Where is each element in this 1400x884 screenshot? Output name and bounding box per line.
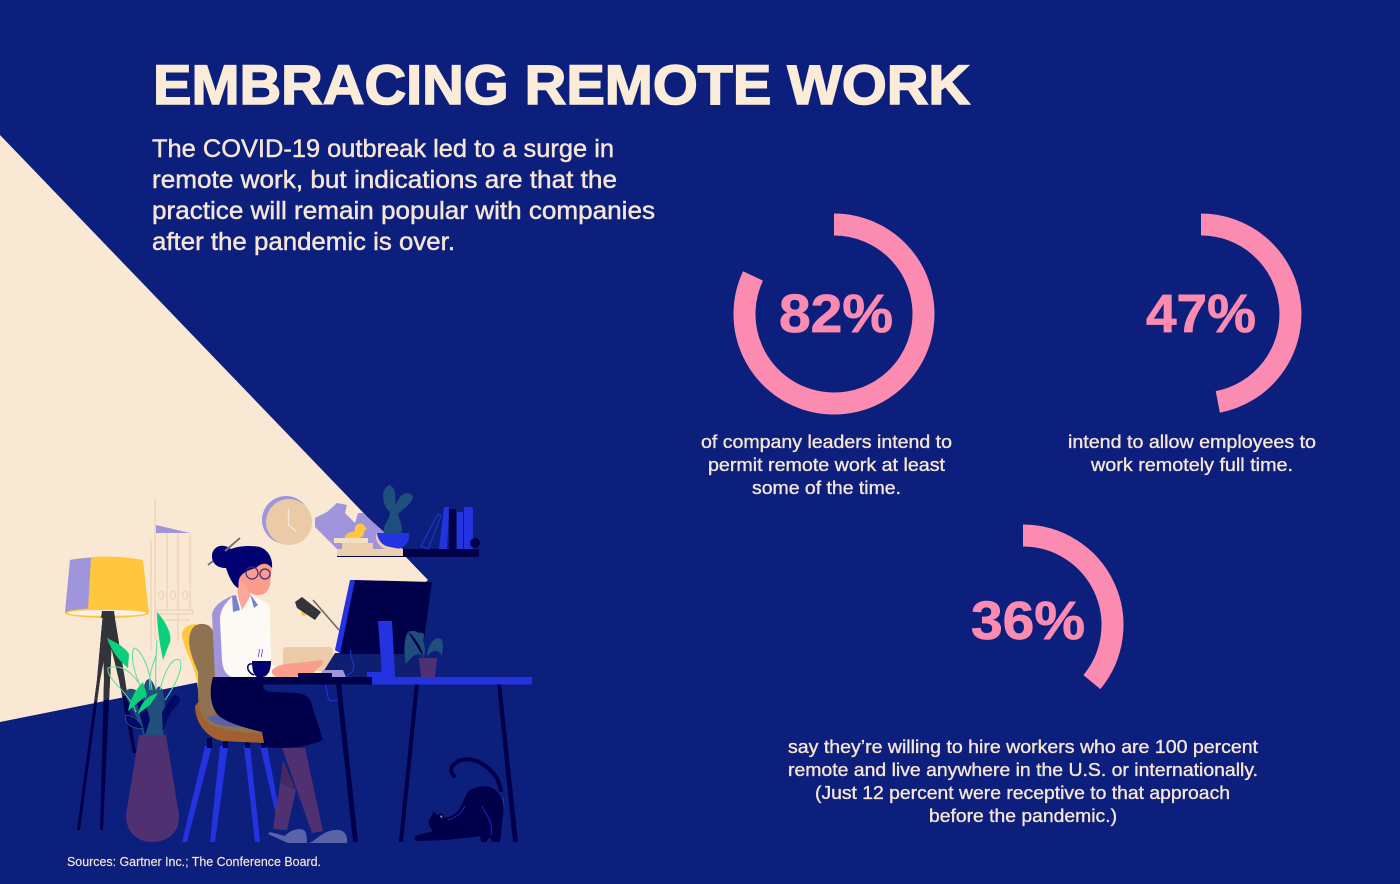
neck and face xyxy=(237,559,272,610)
caption 36%: remote and live anywhere in the U.S. or internationally. xyxy=(788,759,1258,780)
panel: 82 percent stat xyxy=(701,224,952,498)
office chair xyxy=(182,624,281,842)
caption 36% xyxy=(788,736,1258,826)
legs xyxy=(273,748,323,833)
desk xyxy=(213,677,532,842)
potted plant on desk xyxy=(404,631,443,677)
caption 82%: permit remote work at least xyxy=(708,454,945,475)
shelf with books, duck and plant xyxy=(315,485,480,557)
intro text: practice will remain popular with companies xyxy=(152,197,655,225)
floor lamp xyxy=(65,556,149,830)
shirt collar xyxy=(232,594,258,612)
caption 82% xyxy=(701,431,952,498)
sources: Sources: Gartner Inc.; The Conference Board. xyxy=(67,854,321,869)
intro text xyxy=(152,135,655,256)
skirt xyxy=(211,677,323,748)
slippers xyxy=(268,829,347,843)
donut arc 82% xyxy=(744,224,923,403)
number 36%: 36% xyxy=(971,591,1085,651)
caption 36%: say they’re willing to hire workers who are 100 percent xyxy=(788,736,1258,757)
white shirt xyxy=(220,594,282,677)
floor plant and vase xyxy=(107,612,181,842)
intro text: after the pandemic is over. xyxy=(152,228,455,256)
caption 47% xyxy=(1068,431,1316,475)
caption 36%: (Just 12 percent were receptive to that approach xyxy=(815,782,1230,803)
title: EMBRACING REMOTE WORK xyxy=(153,53,970,116)
hair xyxy=(212,546,272,588)
light beam xyxy=(0,135,428,722)
glasses xyxy=(246,567,270,579)
number 82%: 82% xyxy=(779,284,893,344)
computer monitor xyxy=(318,580,432,701)
caption 47%: intend to allow employees to xyxy=(1068,431,1316,452)
desk lamp xyxy=(295,597,339,630)
coffee cup xyxy=(248,649,271,677)
black cat xyxy=(415,759,504,842)
tan papers behind hands xyxy=(283,647,333,671)
intro text: remote work, but indications are that the xyxy=(152,166,617,194)
wall clock xyxy=(262,496,312,545)
caption 82%: of company leaders intend to xyxy=(701,431,952,452)
caption 36%: before the pandemic.) xyxy=(929,805,1117,826)
woman xyxy=(208,538,347,843)
donut arc 36% xyxy=(1023,536,1112,682)
number 47%: 47% xyxy=(1146,284,1256,344)
hands xyxy=(272,660,323,677)
caption 47%: work remotely full time. xyxy=(1090,454,1293,475)
wall shelving line art xyxy=(151,498,193,650)
panel: 47 percent stat xyxy=(1068,224,1316,475)
panel: 36 percent stat xyxy=(788,536,1258,826)
hair pin xyxy=(208,538,240,565)
donut arc 47% xyxy=(1201,224,1290,402)
intro text: The COVID-19 outbreak led to a surge in xyxy=(152,135,614,163)
shirt shadow xyxy=(212,595,238,677)
keyboard xyxy=(298,673,332,677)
illustration: woman working at desk xyxy=(65,485,532,843)
caption 82%: some of the time. xyxy=(752,477,901,498)
